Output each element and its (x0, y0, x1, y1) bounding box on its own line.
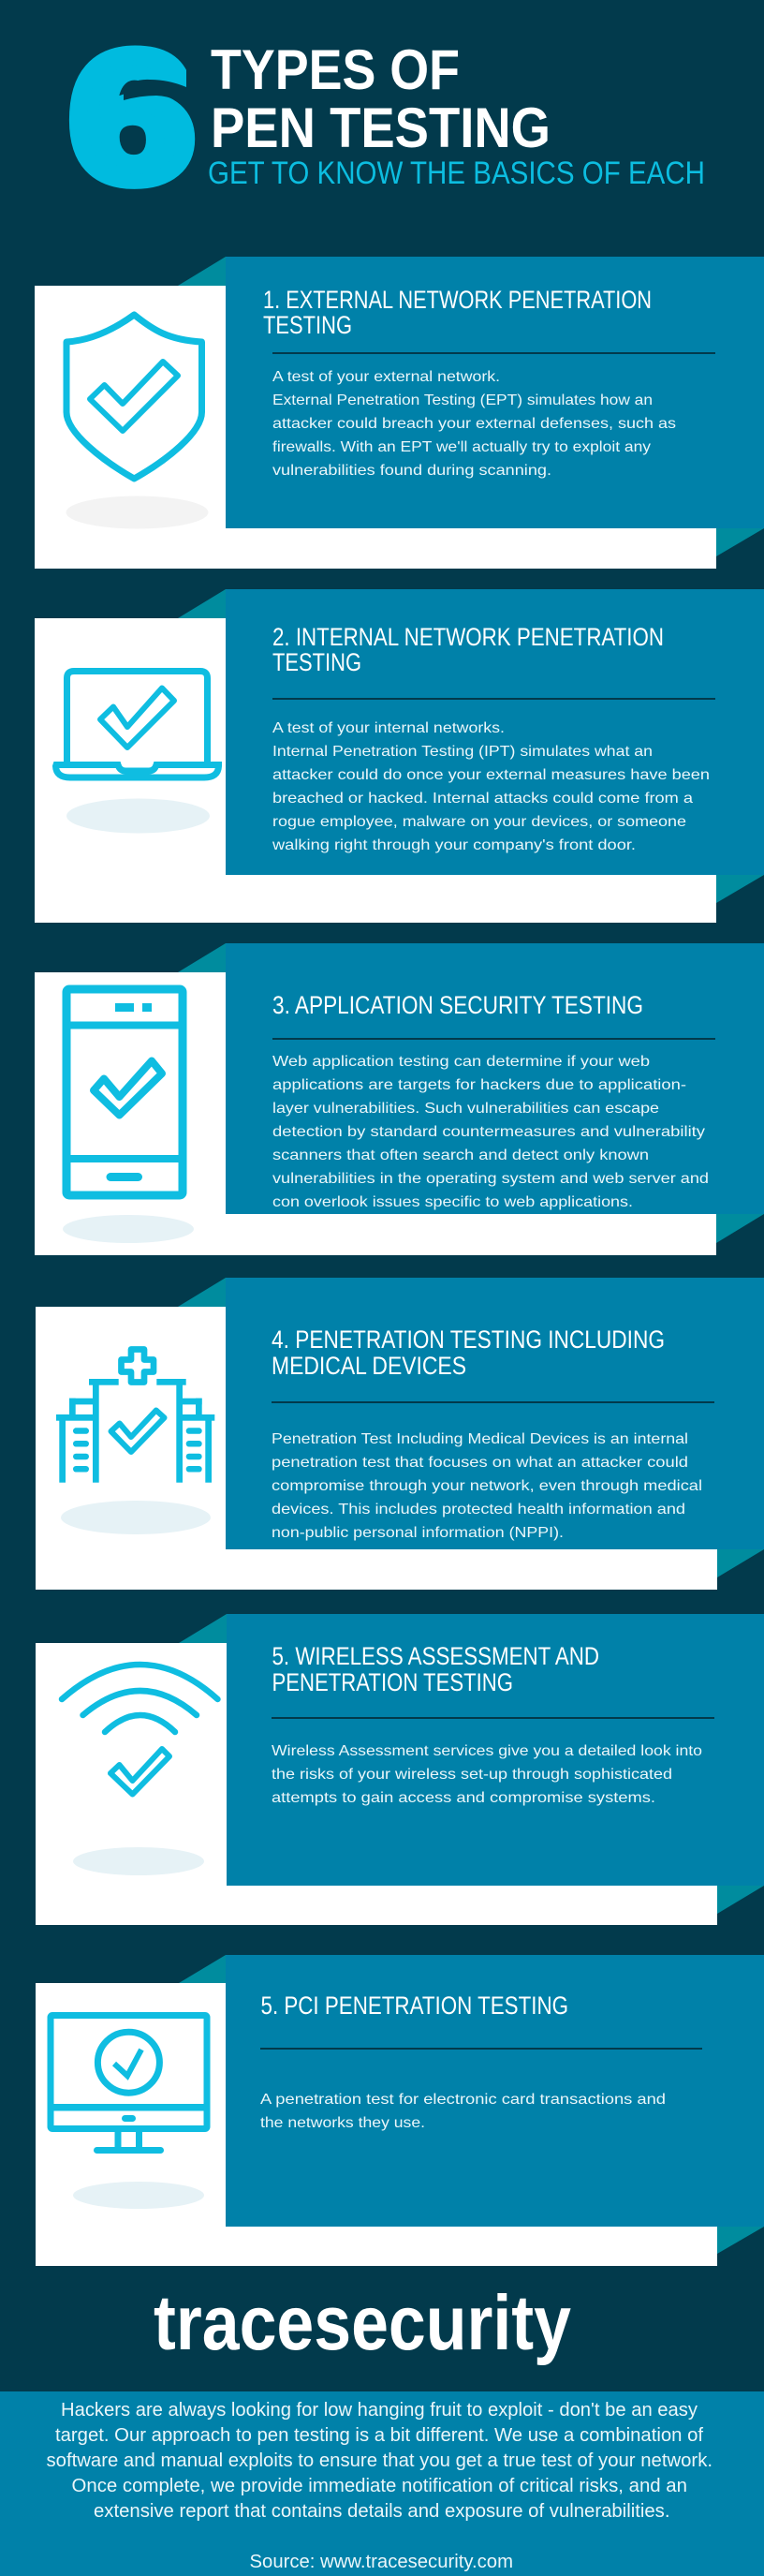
icon: laptop with check (56, 671, 219, 834)
heading: TESTING (272, 648, 361, 676)
body text (272, 369, 676, 479)
icon: monitor with check (51, 2016, 207, 2209)
footer paragraph: software and manual exploits to ensure that you get a true test of your network. (47, 2450, 713, 2471)
body text: the networks they use. (260, 2115, 425, 2131)
body text: the risks of your wireless set-up through sophisticated (272, 1767, 672, 1783)
heading: 2. INTERNAL NETWORK PENETRATION (272, 623, 664, 651)
body text: rogue employee, malware on your devices, or someone (272, 814, 686, 830)
title block (70, 16, 705, 219)
heading line: types of: TYPES OF (211, 38, 460, 101)
heading: MEDICAL DEVICES (272, 1352, 466, 1380)
logo: tracesecurity wordmark: tracesecurity (154, 2279, 571, 2366)
body text: A penetration test for electronic card transactions and (260, 2092, 666, 2108)
heading (272, 1642, 599, 1696)
icon: wifi with check (62, 1665, 217, 1875)
body text (272, 1743, 702, 1806)
heading: TESTING (263, 311, 352, 339)
panel: card 6 PCI (36, 1955, 764, 2266)
subtitle: GET TO KNOW THE BASICS OF EACH (208, 155, 705, 191)
body text: attacker could breach your external defenses, such as (272, 416, 676, 432)
body text: attacker could do once your external measures have been (272, 767, 710, 783)
icon: hospital with check (56, 1349, 214, 1534)
heading (272, 623, 664, 676)
footer paragraph: target. Our approach to pen testing is a bit different. We use a combination of (55, 2425, 703, 2446)
body text: penetration test that focuses on what an attacker could (272, 1455, 688, 1471)
heading: 5. PCI PENETRATION TESTING (260, 1991, 568, 2020)
body text: Internal Penetration Testing (IPT) simulates what an (272, 744, 653, 760)
footer paragraph (47, 2400, 713, 2522)
footer paragraph: extensive report that contains details and exposure of vulnerabilities. (94, 2501, 670, 2522)
footer panel (0, 2391, 764, 2576)
footer paragraph: Once complete, we provide immediate notification of critical risks, and an (71, 2476, 687, 2496)
body text: A test of your internal networks. (272, 720, 505, 736)
big number 6: 6 (70, 16, 194, 219)
heading (272, 1325, 665, 1380)
panel: card 4 medical devices (36, 1278, 764, 1590)
body text: vulnerabilities in the operating system and web server and (272, 1171, 709, 1187)
panel: card 5 wireless (36, 1614, 764, 1925)
body text: scanners that often search and detect only known (272, 1147, 649, 1163)
heading: 5. WIRELESS ASSESSMENT AND (272, 1642, 599, 1670)
panel: card 3 application security (35, 943, 764, 1255)
body text: non-public personal information (NPPI). (272, 1525, 564, 1541)
body text: Wireless Assessment services give you a detailed look into (272, 1743, 702, 1759)
heading: PENETRATION TESTING (272, 1668, 513, 1696)
body text: con overlook issues specific to web applications. (272, 1194, 633, 1210)
heading: 1. EXTERNAL NETWORK PENETRATION (263, 286, 652, 314)
body text: External Penetration Testing (EPT) simulates how an (272, 392, 653, 408)
heading line: pen testing: PEN TESTING (211, 96, 551, 159)
body text: detection by standard countermeasures and vulnerability (272, 1124, 705, 1140)
body text: Web application testing can determine if your web (272, 1054, 650, 1070)
heading: 3. APPLICATION SECURITY TESTING (272, 991, 643, 1019)
body text (260, 2092, 666, 2131)
body text: applications are targets for hackers due to application- (272, 1077, 686, 1093)
body text (272, 720, 710, 853)
icon: smartphone with check (63, 989, 194, 1243)
body text: layer vulnerabilities. Such vulnerabilities can escape (272, 1101, 659, 1117)
panel: card 1 external network (35, 257, 764, 569)
body text: devices. This includes protected health information and (272, 1502, 685, 1517)
body text (272, 1431, 702, 1541)
body text: attempts to gain access and compromise systems. (272, 1790, 655, 1806)
body text: walking right through your company's front door. (272, 837, 636, 853)
footer paragraph: Hackers are always looking for low hanging fruit to exploit - don't be an easy (61, 2400, 698, 2421)
body text: firewalls. With an EPT we'll actually try to exploit any (272, 439, 651, 455)
body text: breached or hacked. Internal attacks could come from a (272, 791, 693, 807)
body text (272, 1054, 709, 1210)
body text: vulnerabilities found during scanning. (272, 463, 551, 479)
source line: Source: www.tracesecurity.com (249, 2552, 513, 2572)
heading: 4. PENETRATION TESTING INCLUDING (272, 1325, 665, 1354)
heading (263, 286, 652, 339)
body text: compromise through your network, even through medical (272, 1478, 702, 1494)
body text: Penetration Test Including Medical Devices is an internal (272, 1431, 688, 1447)
body text: A test of your external network. (272, 369, 500, 385)
panel: card 2 internal network (35, 589, 764, 923)
icon: shield with check (66, 315, 208, 528)
